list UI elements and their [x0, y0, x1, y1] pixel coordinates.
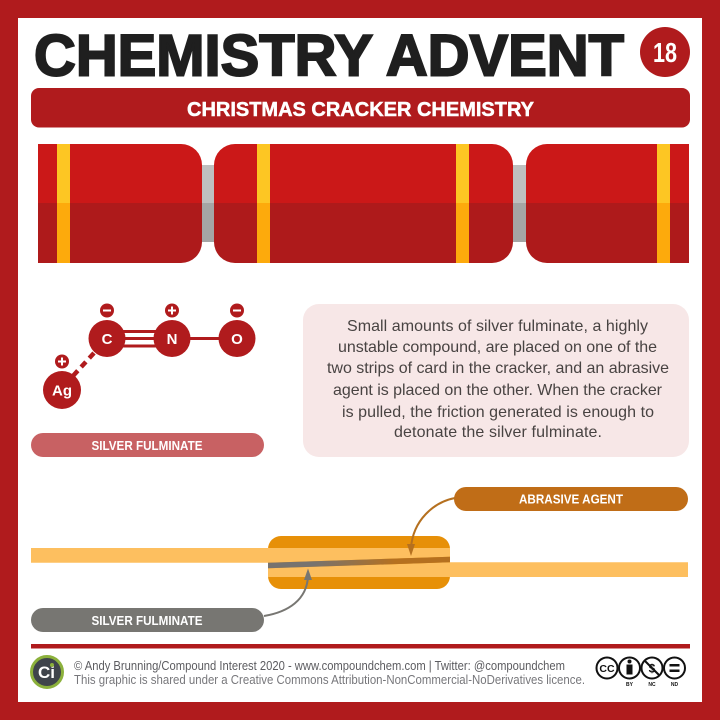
- day number badge: 18: [653, 37, 677, 68]
- explanation panel: Small amounts of silver fulminate, a highly: [347, 318, 648, 335]
- footer rule: [31, 644, 690, 648]
- arrow: silver fulminate: [264, 568, 312, 616]
- licence icons: NC: [648, 682, 656, 688]
- silver fulminate label: SILVER FULMINATE: [92, 613, 203, 628]
- abrasive agent label: ABRASIVE AGENT: [519, 492, 623, 506]
- silver fulminate label: [31, 608, 264, 632]
- credits: [74, 658, 585, 687]
- atom: Ag: Ag: [52, 382, 72, 400]
- abrasive agent label: [454, 487, 688, 511]
- title: CHEMISTRY ADVENT: [34, 24, 624, 88]
- explanation panel: [303, 304, 689, 457]
- licence icons: CC: [599, 663, 615, 675]
- bonds: [72, 332, 237, 377]
- label: silver fulminate: [31, 433, 264, 457]
- cracker illustration: [38, 144, 689, 263]
- molecule: silver fulminate: [43, 304, 256, 409]
- subtitle banner: [31, 88, 690, 128]
- lower card strip: [268, 562, 688, 577]
- explanation panel: unstable compound, are placed on one of the: [338, 339, 657, 356]
- explanation panel: two strips of card in the cracker, and an abrasive: [327, 360, 669, 377]
- chemical wedge: [268, 557, 450, 568]
- arrow: abrasive agent: [407, 498, 455, 556]
- atom: N: [154, 320, 190, 357]
- credits: © Andy Brunning/Compound Interest 2020 - www.compoundchem.com | Twitter: @compoundchem: [74, 658, 565, 673]
- card strips diagram: [31, 536, 688, 589]
- atom: Ag: [43, 371, 81, 409]
- label: silver fulminate: SILVER FULMINATE: [92, 438, 203, 453]
- atom: C: C: [102, 331, 113, 348]
- explanation panel: agent is placed on the other. When the cracker: [333, 382, 663, 399]
- cracker necks: [200, 165, 528, 242]
- licence icons: BY: [626, 682, 634, 688]
- atom: O: O: [231, 331, 243, 348]
- atom: O: [218, 320, 256, 357]
- atom: C: [88, 320, 126, 357]
- licence icons: [596, 658, 685, 688]
- day number badge: [640, 27, 690, 77]
- logo: Ci: [38, 663, 55, 682]
- licence icons: $: [649, 662, 656, 676]
- subtitle banner: CHRISTMAS CRACKER CHEMISTRY: [187, 98, 534, 121]
- explanation panel: detonate the silver fulminate.: [394, 424, 602, 441]
- cracker right section: [526, 144, 689, 263]
- credits: This graphic is shared under a Creative Commons Attribution-NonCommercial-NoDerivatives licence.: [74, 672, 585, 687]
- charges: [55, 304, 244, 368]
- cracker left section: [38, 144, 202, 263]
- logo: [32, 656, 62, 688]
- upper card strip: [31, 548, 450, 563]
- atom: N: N: [167, 331, 177, 348]
- explanation panel: is pulled, the friction generated is enough to: [342, 404, 654, 421]
- card sleeve: [268, 536, 450, 589]
- cracker middle section: [214, 144, 513, 263]
- licence icons: ND: [671, 682, 678, 688]
